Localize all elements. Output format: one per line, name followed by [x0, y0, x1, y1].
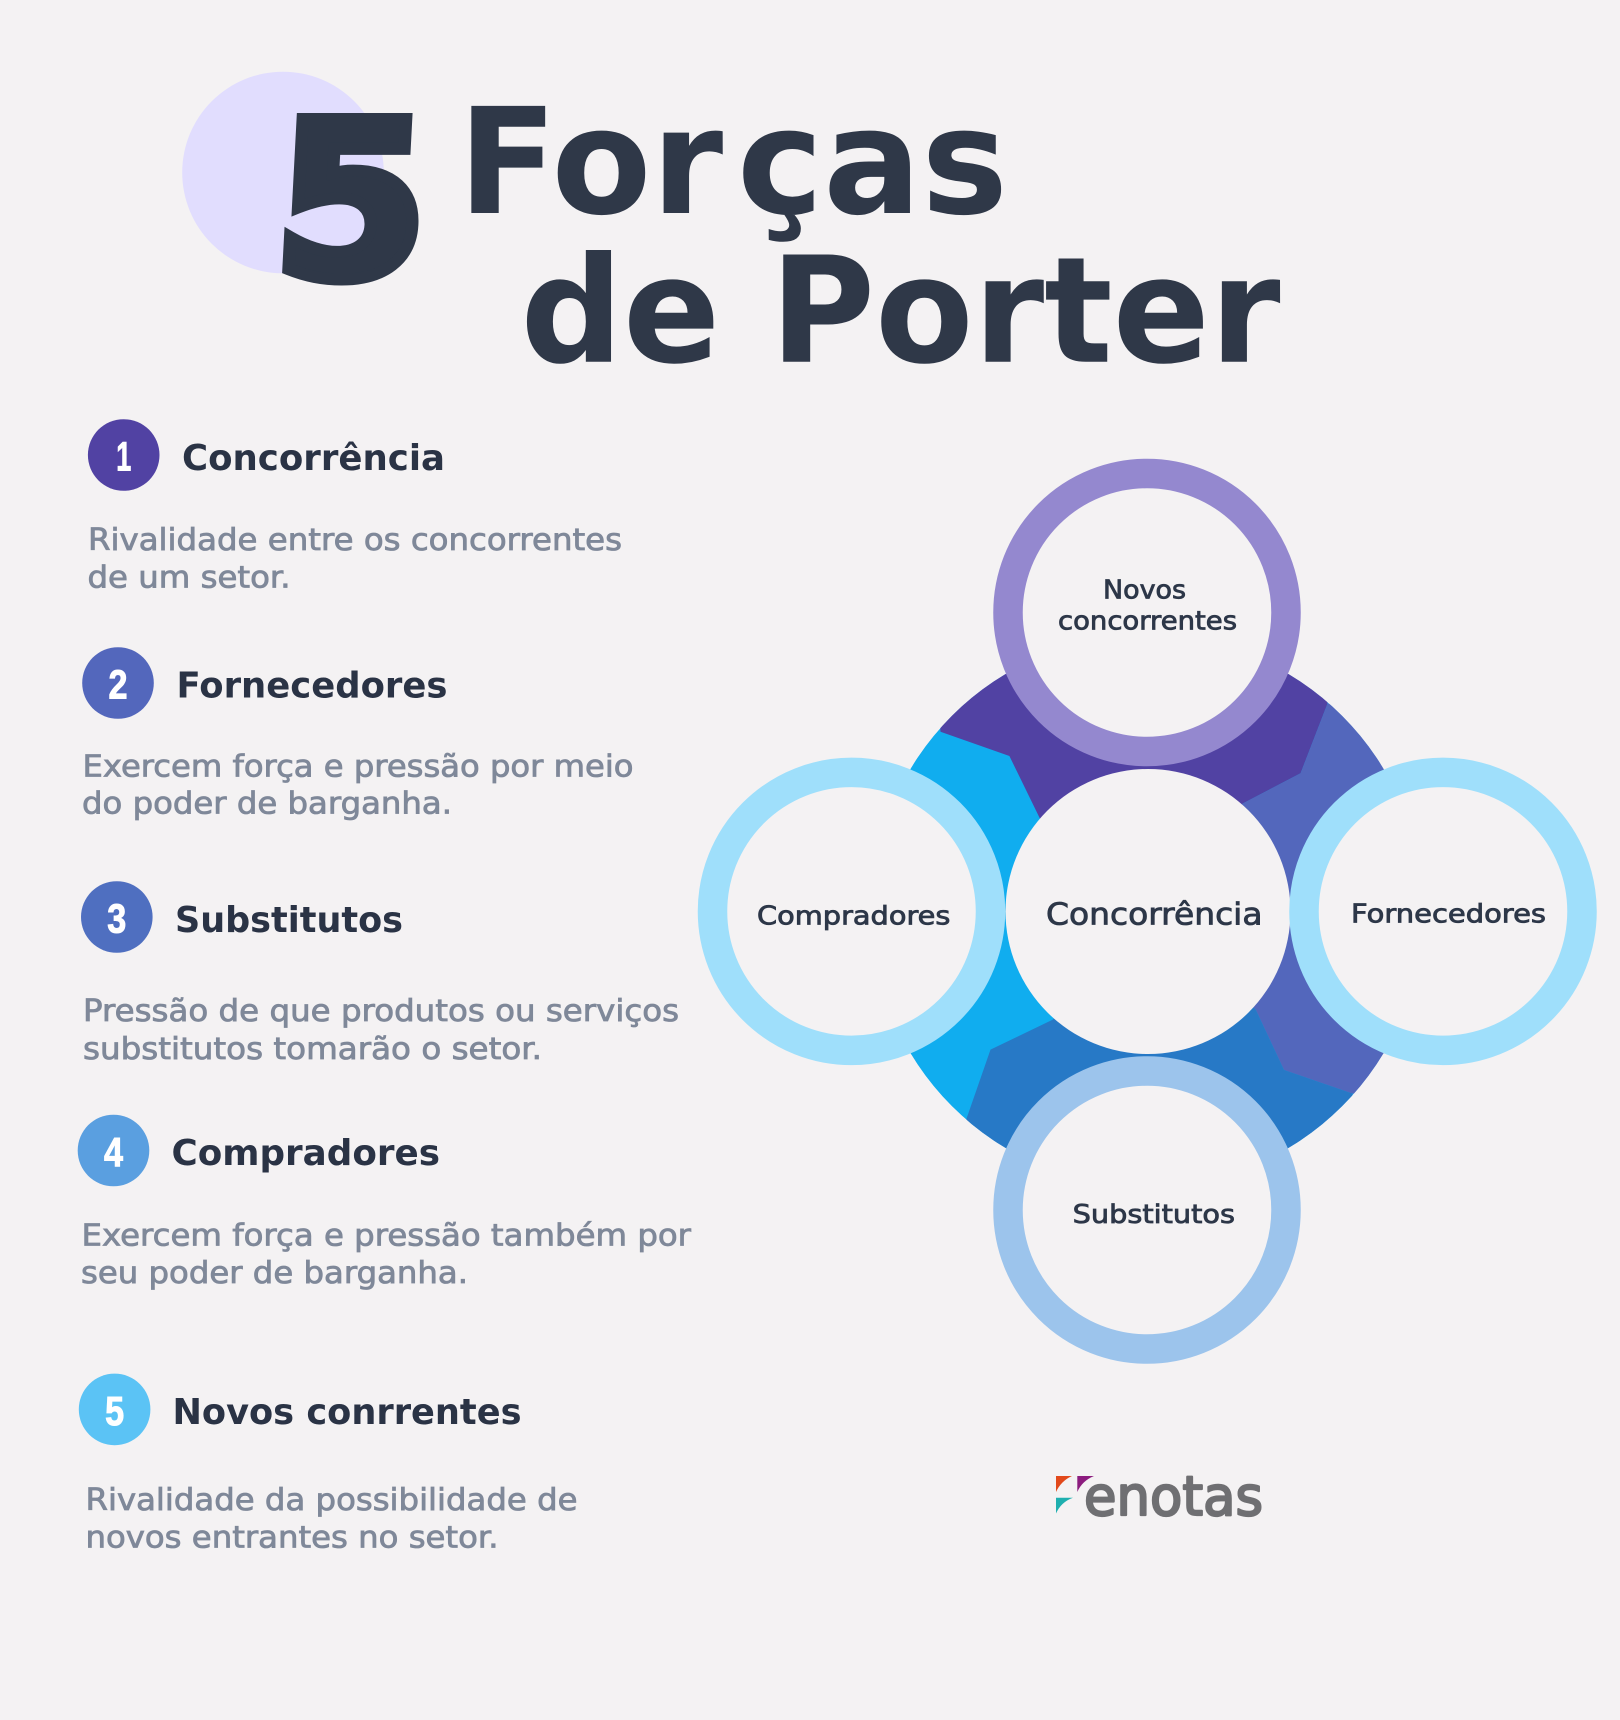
- item 4: Compradores: seu poder de barganha.: [81, 1256, 468, 1291]
- item 1: Concorrência: Concorrência: [182, 438, 445, 479]
- ring: Substitutos: Substitutos: [1073, 1200, 1235, 1230]
- item 3: Substitutos: substitutos tomarão o setor.: [83, 1032, 542, 1067]
- item 2: Fornecedores: Fornecedores: [176, 665, 448, 706]
- item 5: Novos conrrentes: novos entrantes no setor.: [86, 1520, 498, 1556]
- centre circle: Concorrência: Concorrência: [1046, 898, 1262, 933]
- ring: Novos concorrentes: concorrentes: [1058, 607, 1237, 637]
- ring: Novos concorrentes: [1008, 474, 1286, 752]
- item 3: Substitutos: 3: [107, 896, 126, 942]
- title line 2: de Porter: [520, 226, 1281, 397]
- item 4: Compradores: Exercem força e pressão também por: [82, 1218, 691, 1254]
- item 5: Novos conrrentes: 5: [105, 1388, 124, 1434]
- item 4: Compradores: Compradores: [172, 1133, 440, 1174]
- ring: Substitutos: [1008, 1071, 1286, 1349]
- title line 1: Forças: [458, 77, 1008, 248]
- item 3: Substitutos: Substitutos: [175, 900, 403, 941]
- item 4: Compradores: [78, 1115, 691, 1291]
- diagram: five forces: [712, 474, 1582, 1349]
- item 2: Fornecedores: [82, 647, 634, 822]
- title: 5 Forças de Porter: [182, 72, 1281, 397]
- item 2: Fornecedores: 2: [108, 662, 128, 708]
- item 5: Novos conrrentes: Novos conrrentes: [172, 1392, 522, 1433]
- ring: Compradores: [712, 772, 990, 1050]
- ring: Compradores: Compradores: [757, 902, 950, 932]
- item 5: Novos conrrentes: Rivalidade da possibilidade de: [86, 1483, 578, 1518]
- item 1: Concorrência: [88, 419, 622, 596]
- item 2: Fornecedores: Exercem força e pressão por meio: [82, 750, 634, 785]
- ring: Novos concorrentes: Novos: [1103, 576, 1186, 606]
- item 2: Fornecedores: do poder de barganha.: [82, 786, 452, 822]
- item 1: Concorrência: de um setor.: [88, 561, 290, 596]
- big numeral 5: 5: [268, 76, 436, 327]
- multicolour segmented disc: [910, 674, 1384, 1148]
- item 4: Compradores: 4: [104, 1129, 123, 1175]
- panel: list of forces: [78, 419, 691, 1556]
- item 5: Novos conrrentes: [79, 1374, 578, 1556]
- centre circle: Concorrência: [1006, 769, 1290, 1054]
- decorative lavender circle behind the 5: [182, 72, 384, 273]
- logo: enotas: [1056, 1465, 1263, 1528]
- item 3: Substitutos: Pressão de que produtos ou serviços: [83, 994, 679, 1029]
- logo mark: [1056, 1476, 1094, 1514]
- item 1: Concorrência: Rivalidade entre os concorrentes: [88, 523, 622, 558]
- logo wordmark: enotas: [1084, 1465, 1263, 1528]
- ring: Fornecedores: Fornecedores: [1351, 899, 1546, 929]
- ring: Fornecedores: [1304, 772, 1582, 1050]
- item 1: Concorrência: 1: [116, 434, 131, 480]
- item 3: Substitutos: [81, 881, 679, 1067]
